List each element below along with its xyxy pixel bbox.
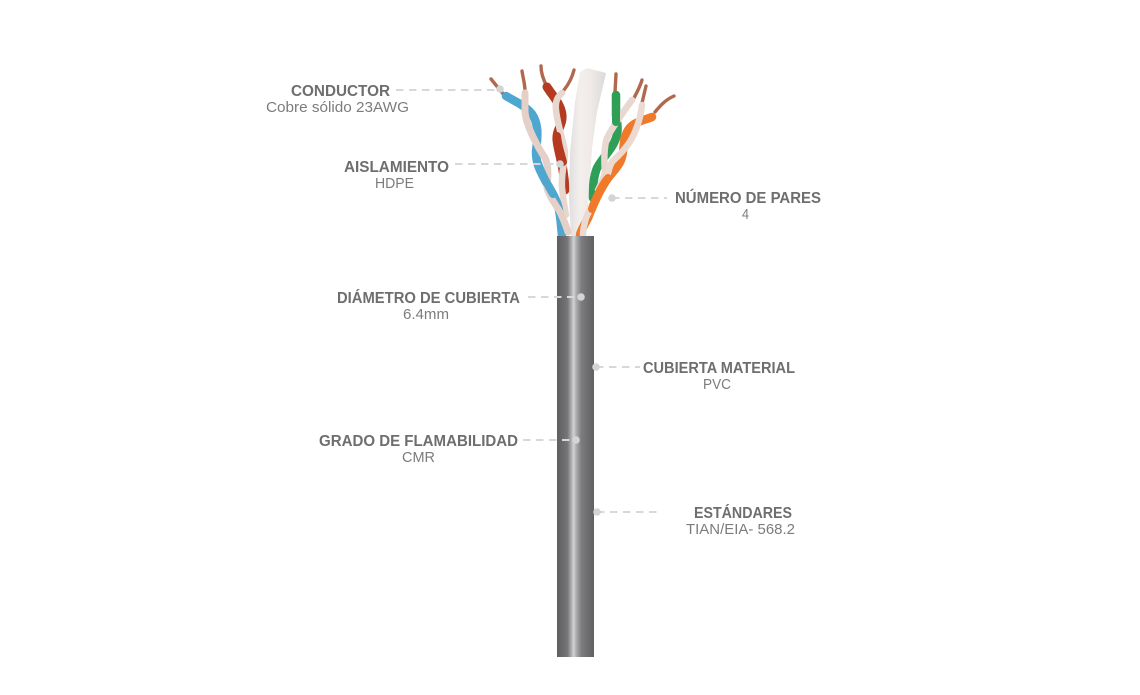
callout: numero de pares: 4 [742,206,749,223]
callout: conductor: Cobre sólido 23AWG [266,99,409,116]
wire pair: blue and white [491,71,568,235]
callout: grado de flamabilidad [319,433,580,466]
callout: grado de flamabilidad: CMR [402,449,435,466]
callout: numero de pares: NÚMERO DE PARES [675,189,821,207]
wire pair: green and white [593,74,642,198]
callout: diametro de cubierta [337,290,585,323]
callout: aislamiento [344,159,564,192]
callout: conductor [266,83,504,116]
callout: conductor: CONDUCTOR [291,83,390,100]
callout: cubierta material [592,360,795,393]
callout: estandares: ESTÁNDARES [694,505,792,522]
callout: diametro de cubierta: DIÁMETRO DE CUBIERTA [337,290,520,307]
callout: diametro de cubierta: 6.4mm [403,306,449,323]
callout: aislamiento: AISLAMIENTO [344,159,449,176]
wire pair: orange and white [580,86,674,235]
wire pair: red and white [541,66,574,215]
callout: grado de flamabilidad: GRADO DE FLAMABILIDAD [319,433,518,450]
callout: estandares: TIAN/EIA- 568.2 [686,521,795,538]
callout: estandares [593,505,795,538]
callout: cubierta material: CUBIERTA MATERIAL [643,360,795,377]
callout: cubierta material: PVC [703,376,731,393]
cable jacket [557,236,594,657]
callout: numero de pares [608,189,821,223]
central separator [569,68,606,236]
callout: aislamiento: HDPE [375,175,414,192]
